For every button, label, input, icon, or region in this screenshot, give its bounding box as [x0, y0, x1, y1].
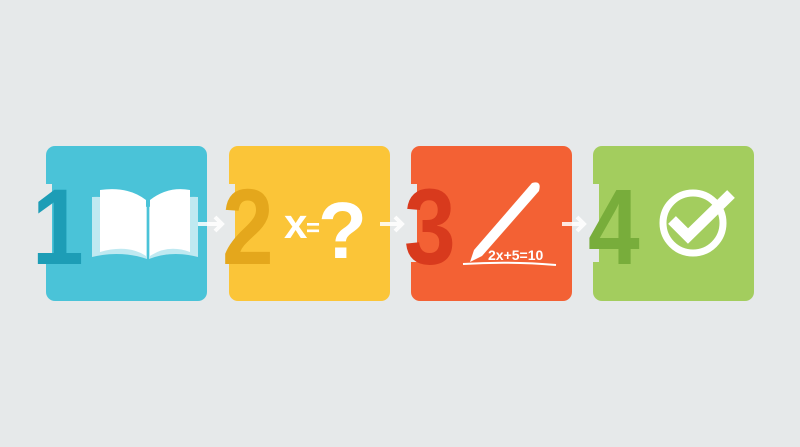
arrow 2: [380, 217, 402, 231]
panel 4: check: [593, 146, 754, 301]
number 2: 2: [222, 166, 274, 287]
panel 1: read: [46, 146, 207, 301]
panel 2: question: [229, 146, 390, 301]
icon: x=?: =: [306, 215, 320, 242]
icon: x=?: ?: [318, 186, 367, 275]
icon: open book: [92, 189, 198, 259]
icon: x=?: x: [284, 200, 308, 247]
icon: x=?: [284, 186, 367, 275]
icon: pen with equation: [463, 182, 556, 265]
number 1: 1: [32, 166, 84, 287]
icon: pen with equation: 2x+5=10: [488, 247, 543, 263]
arrow 1: [198, 217, 222, 231]
arrow 3: [562, 217, 584, 231]
number 3: 3: [404, 166, 456, 287]
panel 3: write: [411, 146, 572, 301]
number 4: 4: [588, 166, 640, 287]
icon: check circle: [663, 193, 731, 253]
